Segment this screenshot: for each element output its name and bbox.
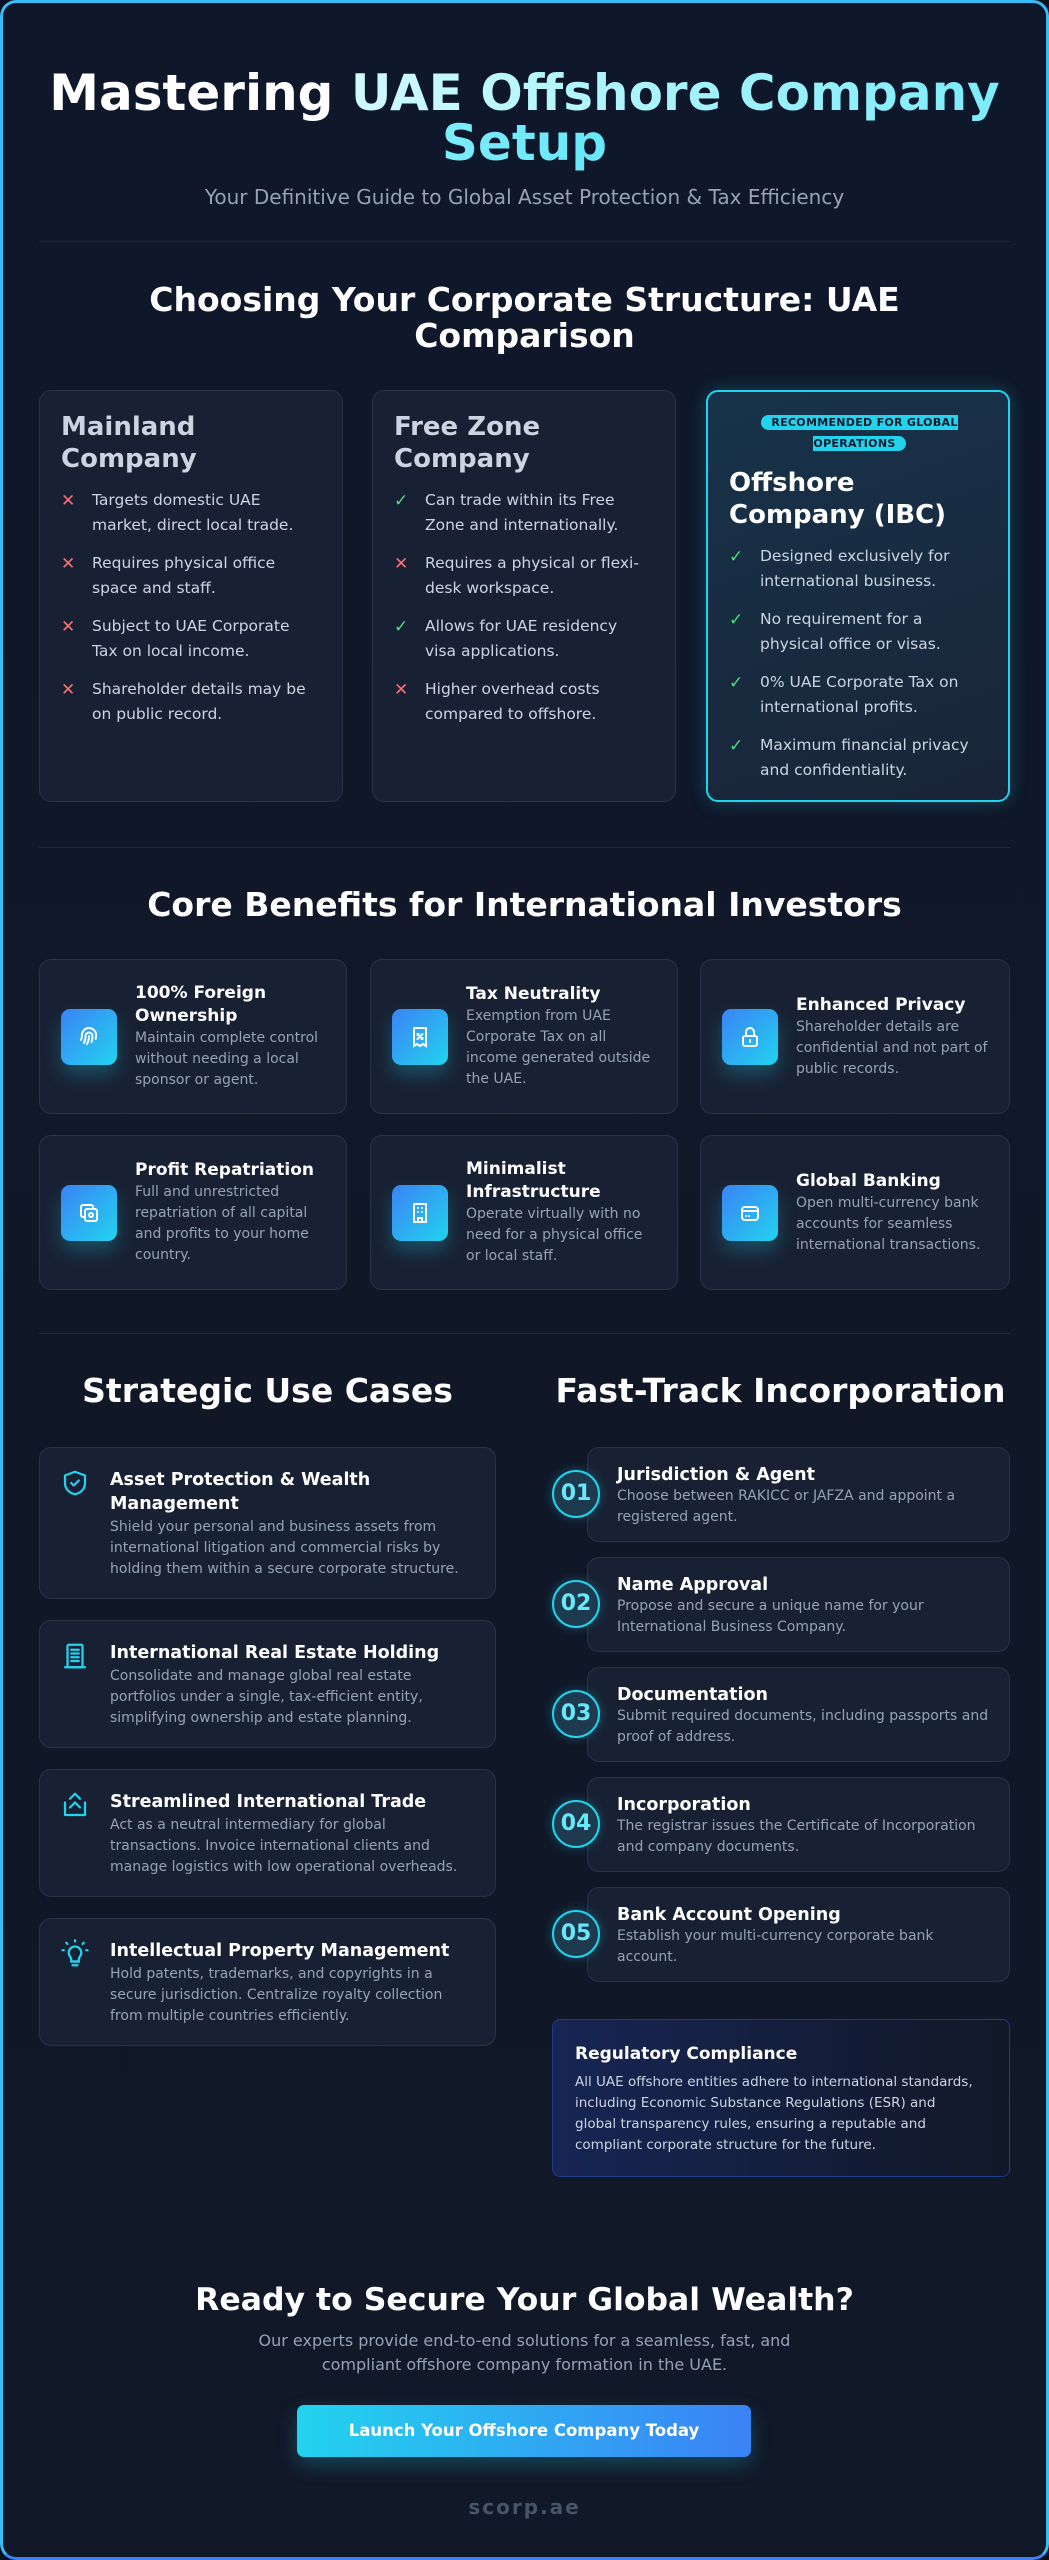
step 5: [587, 1887, 1010, 1982]
badge: recommended: RECOMMENDED FOR GLOBAL OPERATIONS: [771, 416, 958, 450]
use case: trade: Streamlined International Trade: [110, 1792, 426, 1812]
benefit: foreign ownership: Maintain complete control without needing a local sponsor or agent.: [135, 1030, 318, 1088]
callout: regulatory compliance: compliant corporate structure for the future.: [575, 2137, 876, 2153]
panel: offshore company: ✓: [729, 673, 743, 693]
CTA heading: Ready to Secure Your Global Wealth?: [195, 2282, 854, 2318]
benefit: minimalist infrastructure: Operate virtually with no need for a physical office or local staff.: [466, 1206, 642, 1264]
use case: asset protection: Asset Protection & Wealth Management: [110, 1470, 370, 1514]
step 2: [587, 1557, 1010, 1652]
CTA text: Our experts provide end-to-end solutions for a seamless, fast, and: [259, 2331, 790, 2350]
benefit: profit repatriation: Profit Repatriation: [135, 1160, 314, 1180]
benefit: profit repatriation: [39, 1135, 347, 1290]
benefit: tax neutrality: Exemption from UAE Corporate Tax on all income generated outside the UAE.: [466, 1008, 650, 1087]
panel: mainland company: ✕: [61, 491, 75, 511]
heading: fast-track incorporation: Fast-Track Incorporation: [556, 1371, 1005, 1410]
icon: building: [392, 1184, 448, 1240]
benefit: global banking: Open multi-currency bank accounts for seamless international transactions.: [796, 1194, 980, 1252]
panel: offshore company: Designed exclusively for international business.: [760, 547, 949, 590]
use case: IP: Hold patents, trademarks, and copyrights in a secure jurisdiction. Centralize royalty collection from multiple countries efficiently.: [110, 1966, 442, 2024]
icon: receipt: [392, 1008, 448, 1064]
benefit: enhanced privacy: [700, 959, 1010, 1114]
panel: mainland company: Targets domestic UAE market, direct local trade.: [92, 491, 293, 534]
step 4: [587, 1777, 1010, 1872]
panel: mainland company: ✕: [61, 680, 75, 700]
step number 02: 02: [561, 1591, 591, 1616]
CTA text: compliant offshore company formation in the UAE.: [322, 2355, 727, 2374]
panel: free zone company: Requires a physical or flexi-desk workspace.: [425, 554, 639, 596]
panel: free zone company: ✓: [394, 491, 408, 511]
benefit: enhanced privacy: Enhanced Privacy: [796, 994, 965, 1014]
step 1: Jurisdiction & Agent: [617, 1465, 815, 1485]
panel: mainland company: Shareholder details may be on public record.: [92, 680, 306, 722]
panel: free zone company: Can trade within its Free Zone and internationally.: [425, 491, 618, 534]
panel: offshore company: 0% UAE Corporate Tax on international profits.: [760, 673, 958, 716]
use case: asset protection: Shield your personal and business assets from international litigation and commercial risks by holding them within a secure corporate structure.: [110, 1519, 459, 1577]
benefit: enhanced privacy: Shareholder details are confidential and not part of public records.: [796, 1018, 987, 1076]
step 1: Choose between RAKICC or JAFZA and appoint a registered agent.: [617, 1488, 955, 1525]
step number 05: [552, 1910, 600, 1958]
panel: offshore company: ✓: [729, 547, 743, 567]
callout: regulatory compliance: global transparency rules, ensuring a reputable and: [575, 2116, 926, 2132]
panel: offshore company: ✓: [729, 736, 743, 756]
step number 01: 01: [561, 1481, 591, 1506]
footer brand: scorp.ae: [468, 2495, 581, 2519]
step 3: Submit required documents, including passports and proof of address.: [617, 1708, 988, 1745]
icon: card: [722, 1184, 778, 1240]
use case: real estate: Consolidate and manage global real estate portfolios under a single, tax-efficient entity, simplifying ownership and estate planning.: [110, 1668, 423, 1726]
panel: offshore company: Offshore Company (IBC): [729, 468, 946, 530]
step 5: Establish your multi-currency corporate bank account.: [617, 1928, 934, 1965]
CTA text: [259, 2331, 790, 2374]
step number 04: 04: [561, 1811, 591, 1836]
icon: fingerprint: [61, 1008, 117, 1064]
heading: corporate structure: Choosing Your Corporate Structure: UAE Comparison: [149, 280, 900, 355]
use case: trade: Act as a neutral intermediary for global transactions. Invoice international clients and manage logistics with low operational overheads.: [110, 1817, 457, 1875]
panel: offshore company: [706, 390, 1010, 802]
step 2: Name Approval: [617, 1575, 768, 1595]
use case: real estate: [39, 1620, 496, 1748]
step 4: The registrar issues the Certificate of Incorporation and company documents.: [617, 1818, 976, 1855]
step 5: Bank Account Opening: [617, 1905, 841, 1925]
benefit: tax neutrality: [370, 959, 678, 1114]
panel: offshore company: Maximum financial privacy and confidentiality.: [760, 736, 969, 778]
panel: free zone company: Free Zone Company: [394, 412, 540, 474]
title: Mastering UAE Offshore Company Setup: [49, 64, 1000, 172]
panel: free zone company: ✕: [394, 554, 408, 574]
benefit: foreign ownership: 100% Foreign Ownership: [135, 983, 266, 1026]
step 4: Incorporation: [617, 1795, 751, 1815]
heading: core benefits: Core Benefits for International Investors: [147, 885, 902, 924]
step 2: Propose and secure a unique name for your International Business Company.: [617, 1598, 924, 1635]
panel: free zone company: ✕: [394, 680, 408, 700]
step number 02: [552, 1580, 600, 1628]
panel: mainland company: ✕: [61, 554, 75, 574]
panel: free zone company: [372, 390, 676, 802]
panel: mainland company: [39, 390, 343, 802]
panel: free zone company: Allows for UAE residency visa applications.: [425, 617, 617, 660]
panel: mainland company: ✕: [61, 617, 75, 637]
benefit: minimalist infrastructure: [370, 1135, 678, 1290]
panel: mainland company: Requires physical office space and staff.: [92, 554, 275, 596]
use case: asset protection: [39, 1447, 496, 1599]
step 3: [587, 1667, 1010, 1762]
step number 03: [552, 1690, 600, 1738]
benefit: global banking: [700, 1135, 1010, 1290]
callout: regulatory compliance: Regulatory Compliance: [575, 2044, 797, 2064]
benefit: tax neutrality: Tax Neutrality: [466, 984, 600, 1004]
panel: free zone company: ✓: [394, 617, 408, 637]
use case: IP: [39, 1918, 496, 2046]
step number 03: 03: [561, 1701, 591, 1726]
panel: offshore company: No requirement for a physical office or visas.: [760, 610, 941, 652]
panel: offshore company: ✓: [729, 610, 743, 630]
panel: free zone company: Higher overhead costs compared to offshore.: [425, 680, 600, 722]
benefit: profit repatriation: Full and unrestricted repatriation of all capital and profits to your home country.: [135, 1184, 309, 1263]
callout: regulatory compliance: All UAE offshore entities adhere to international standards, including Economic Substance Regulations (ESR) and: [575, 2074, 973, 2111]
benefit: foreign ownership: [39, 959, 347, 1114]
button: [297, 2405, 751, 2457]
use case: real estate: International Real Estate Holding: [110, 1643, 439, 1663]
callout: regulatory compliance: [552, 2019, 1010, 2177]
subtitle: Your Definitive Guide to Global Asset Protection & Tax Efficiency: [205, 185, 844, 209]
benefit: global banking: Global Banking: [796, 1170, 941, 1190]
step 1: [587, 1447, 1010, 1542]
step 3: Documentation: [617, 1685, 768, 1705]
panel: mainland company: Subject to UAE Corporate Tax on local income.: [92, 617, 290, 660]
step number 01: [552, 1470, 600, 1518]
button: Launch Your Offshore Company Today: [349, 2421, 699, 2440]
step number 05: 05: [561, 1921, 591, 1946]
panel: mainland company: Mainland Company: [61, 412, 197, 474]
benefit: minimalist infrastructure: Minimalist Infrastructure: [466, 1159, 601, 1202]
icon: money: [61, 1184, 117, 1240]
heading: strategic use cases: Strategic Use Cases: [82, 1371, 453, 1410]
use case: trade: [39, 1769, 496, 1897]
use case: IP: Intellectual Property Management: [110, 1941, 449, 1961]
icon: lock: [722, 1008, 778, 1064]
step number 04: [552, 1800, 600, 1848]
panel: use cases: [39, 1447, 496, 2046]
